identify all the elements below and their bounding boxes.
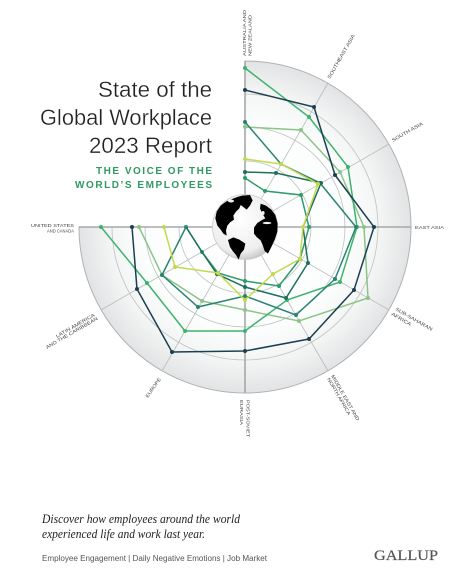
title: State of the xyxy=(98,77,212,102)
series: light green xyxy=(137,125,370,323)
chart background sector xyxy=(79,61,411,393)
topics line: Employee Engagement | Daily Negative Emotions | Job Market xyxy=(42,554,268,563)
label: New Zealand line: NEW ZEALAND xyxy=(248,14,254,56)
label: North Africa: NORTH AFRICA xyxy=(325,377,352,417)
subtitle xyxy=(75,166,212,191)
main axes xyxy=(79,61,411,393)
label: Latin America: LATIN AMERICA xyxy=(55,312,97,340)
series: navy xyxy=(130,88,376,354)
series: dark green xyxy=(186,170,323,300)
label: And Canada: AND CANADA xyxy=(47,228,75,234)
series: bright green xyxy=(99,66,359,333)
label: Middle East and: MIDDLE EAST AND xyxy=(329,374,361,423)
icon: globe xyxy=(212,194,278,260)
label: United States: UNITED STATES xyxy=(31,223,74,229)
series: teal xyxy=(160,120,358,317)
label: Africa: AFRICA xyxy=(390,312,413,328)
label: Eurasia: EURASIA xyxy=(238,400,244,426)
title: 2023 Report xyxy=(89,133,213,158)
tagline: experienced life and work last year. xyxy=(42,527,205,541)
tagline: Discover how employees around the world xyxy=(41,512,241,526)
series: yellow green xyxy=(162,157,320,302)
label: South Asia: SOUTH ASIA xyxy=(391,121,425,144)
subtitle: THE VOICE OF THE xyxy=(96,166,212,177)
subtitle: WORLD’S EMPLOYEES xyxy=(75,180,212,191)
axis labels xyxy=(31,9,445,437)
title xyxy=(40,77,213,158)
radar chart xyxy=(79,61,411,393)
label: Australia and New Zealand: AUSTRALIA AND xyxy=(242,9,248,56)
globe highlights xyxy=(228,200,272,224)
label: Sub-Saharan: SUB-SAHARAN xyxy=(394,307,434,333)
label: Europe: EUROPE xyxy=(145,377,163,399)
label: And the Caribbean: AND THE CARIBBEAN xyxy=(45,316,100,351)
spokes xyxy=(101,83,389,371)
series: medium green xyxy=(184,176,311,288)
logo: Gallup: GALLUP xyxy=(374,548,438,564)
label: Post-Soviet: POST-SOVIET xyxy=(244,400,250,437)
title: Global Workplace xyxy=(40,105,212,130)
tagline xyxy=(41,512,241,541)
label: East Asia: EAST ASIA xyxy=(415,225,445,231)
concentric rings xyxy=(112,94,378,360)
label: Southeast Asia: SOUTHEAST ASIA xyxy=(327,33,357,80)
